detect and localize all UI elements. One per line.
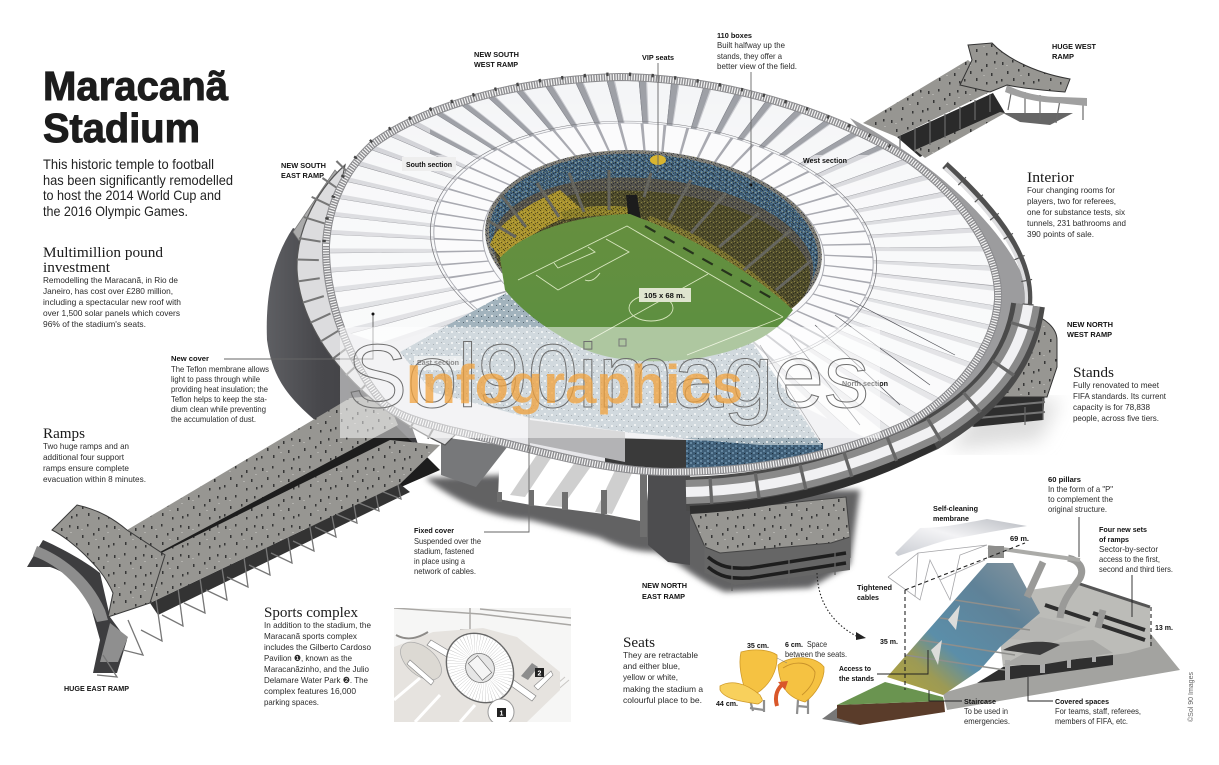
callout: fixed cover: stadium, fastened [414,546,474,556]
callout: fixed cover: Fixed cover [414,526,454,535]
label: new north east ramp [642,581,687,601]
block: sports complex: Pavilion ❶, known as the [264,653,352,663]
title: Stadium [43,105,200,151]
map badge 1 [497,708,506,718]
section ground shadow [822,708,860,725]
ramp arms [127,395,398,552]
block: multimillion investment [43,245,181,329]
ramp support legs [97,485,401,677]
block: sports complex: Delamare Water Park ❷. The [264,675,368,685]
block: interior: tunnels, 231 bathrooms and [1027,218,1126,228]
section labels: South section [406,160,452,169]
block: interior: Interior [1027,170,1074,186]
watermark: Sol90images [347,327,869,427]
block: stands [1073,365,1167,423]
parking level [977,655,1113,683]
section labels: Access to [839,664,871,673]
tunnel [626,195,641,220]
site map [394,608,571,725]
section labels: 13 m. [1155,623,1173,632]
callout: 60 pillars [1048,475,1113,514]
darker upper roof panels [430,81,883,155]
seating slope [887,563,1040,695]
stand aisles [487,170,812,290]
callout: covered spaces: members of FIFA, etc. [1055,716,1128,726]
cables [888,545,987,600]
block: seats: and either blue, [623,661,680,671]
block: multimillion investment: over 1,500 solar panels which covers [43,308,180,318]
stub columns [497,470,647,537]
ramp shadow [27,540,127,673]
block: sports complex: Sports complex [264,605,358,621]
callout: fixed cover: Suspended over the [414,536,481,546]
map badge 2 [535,668,544,678]
ramp junction plate [52,505,165,617]
top labels: EAST RAMP [281,171,324,180]
callout: covered spaces: For teams, staff, referees, [1055,706,1141,716]
intro text: has been significantly remodelled [43,172,233,188]
section labels: Self-cleaning [933,504,978,513]
block: sports complex: complex features 16,000 [264,686,356,696]
concrete base [943,633,1180,710]
ramp block [1000,583,1150,667]
block: sports complex [264,605,371,707]
ramp legs [900,88,1083,157]
near blue seats [686,440,823,468]
icon: seats illustration [720,650,824,714]
block: ramps: evacuation within 8 minutes. [43,474,146,484]
top labels: HUGE WEST [1052,42,1096,51]
cutaway gap below the near stands [497,445,690,565]
roof [330,81,994,468]
intro text [43,156,233,219]
callout: four new sets of ramps: of ramps [1099,535,1129,544]
seat dimension labels: 35 cm. [747,641,769,650]
new north east ramp [690,497,850,591]
left facade chunk [441,437,508,487]
callout: boxes: Built halfway up the [717,40,785,50]
block: multimillion investment: Remodelling the Maracanã, in Rio de [43,275,178,285]
callout: covered spaces: Covered spaces [1055,697,1109,706]
seat dimension labels [716,639,847,708]
callout: staircase [964,697,1010,726]
top labels: RAMP [1052,52,1074,61]
block: ramps [43,426,146,484]
callout: staircase: Staircase [964,697,996,706]
new north west ramp [973,313,1057,427]
map land [394,628,560,722]
callout: 60 pillars: original structure. [1048,504,1107,514]
callout: new cover: dium clean while preventing [171,404,266,414]
callout: new cover: The Teflon membrane allows [171,364,269,374]
block: stands: FIFA standards. Its current [1073,391,1167,401]
top labels [281,42,1113,339]
section labels [839,504,1173,683]
block: multimillion investment: including a spectacular new roof with [43,297,181,307]
seat dimension labels: Space [807,639,827,649]
intro text: This historic temple to football [43,156,214,172]
block: interior: 390 points of sale. [1027,229,1094,239]
section labels: membrane [933,514,969,523]
map ramps [427,640,536,701]
callout: 60 pillars: 60 pillars [1048,475,1081,484]
bowl far stands [485,150,822,309]
pitch size tag: 105 x 68 m. [644,291,685,300]
callout: four new sets of ramps [1099,525,1173,574]
callout: 60 pillars: to complement the [1048,494,1113,504]
tube pillars [686,305,1028,492]
section labels [402,156,888,388]
right facade [686,165,1028,510]
map water park 2 [521,663,538,680]
pitch size tag [639,288,691,302]
fold arrow [776,684,783,706]
right rim fill [850,118,1030,440]
seat dimension labels: 44 cm. [716,699,738,708]
map roads [394,608,571,630]
block: stands: capacity is for 78,838 [1073,402,1150,412]
block: seats: Seats [623,635,655,651]
block: interior: players, two for referees, [1027,196,1116,206]
top labels: VIP seats [642,53,674,62]
block: multimillion investment: 96% of the stadium's seats. [43,319,146,329]
section labels: East section [417,358,459,367]
block: stands: people, across five tiers. [1073,413,1159,423]
top beam [988,547,1080,560]
callout: four new sets of ramps: access to the first, [1099,554,1160,564]
top labels: WEST RAMP [474,60,518,69]
top labels: NEW SOUTH [474,50,519,59]
boxes leader [750,72,752,185]
block: sports complex: In addition to the stadium, the [264,620,371,630]
section labels: Tightened [857,583,892,592]
top labels: NEW SOUTH [281,161,326,170]
dotted arrow to section [817,573,866,640]
block: seats [623,635,703,705]
map stadium [446,632,514,704]
map badge 1: 1 [500,710,504,718]
block: ramps: Two huge ramps and an [43,441,129,451]
block: multimillion investment: Janeiro, has cost over £280 million, [43,286,173,296]
label: new north east ramp: NEW NORTH [642,581,687,590]
section labels: the stands [839,674,874,683]
block: ramps: additional four support [43,452,125,462]
block: stands: Stands [1073,365,1114,381]
new south east ramp [293,170,342,242]
callout: new cover: providing heat insulation; the [171,384,268,394]
callout: new cover: the accumulation of dust. [171,414,256,424]
block: seats: colourful place to be. [623,695,702,705]
top labels: NEW NORTH [1067,320,1113,329]
label: new north east ramp: EAST RAMP [642,592,685,601]
callout: boxes: better view of the field. [717,61,797,71]
block: interior: one for substance tests, six [1027,207,1126,217]
callout: boxes: 110 boxes [717,31,752,40]
section labels: West section [803,156,847,165]
title [43,63,228,151]
new cover leader [224,314,373,359]
section labels: North section [842,379,888,388]
near side cut band [348,326,864,462]
roof panels [349,64,959,436]
fixed cover leader [484,410,529,532]
callout: staircase: To be used in [964,706,1008,716]
roof ring [324,74,998,472]
block: interior: Four changing rooms for [1027,185,1115,195]
block: sports complex: Maracanã sports complex [264,631,358,641]
benches [645,226,775,300]
callout: staircase: emergencies. [964,716,1010,726]
callout: boxes: stands, they offer a [717,51,782,61]
open seat [740,650,777,693]
intro text: the 2016 Olympic Games. [43,203,188,219]
yellow seats [490,190,585,262]
block: sports complex: Maracanãzinho, and the Julio [264,664,369,674]
folded seat [778,658,824,702]
pillars [1027,558,1103,628]
right near roof panels [760,300,955,440]
section leaders [1078,517,1080,557]
callout: 60 pillars: In the form of a "P" [1048,484,1113,494]
callout: covered spaces [1055,697,1141,726]
intro text: to host the 2014 World Cup and [43,187,221,203]
dimension lines [905,543,1151,690]
callout: new cover: New cover [171,354,209,363]
callout: fixed cover [414,526,481,576]
near dark gallery [605,438,686,470]
stadium ground shadows [267,228,1060,592]
block: sports complex: parking spaces. [264,697,319,707]
huge east ramp [27,395,440,677]
callout: four new sets of ramps: second and third tiers. [1099,564,1173,574]
block: interior [1027,170,1126,239]
map track [400,642,442,680]
callout: fixed cover: network of cables. [414,566,476,576]
block: seats: making the stadium a [623,684,703,694]
section labels: 35 m. [880,637,898,646]
block: sports complex: includes the Gilberto Cardoso [264,642,371,652]
callout: new cover: Teflon helps to keep the sta- [171,394,267,404]
map badge 2: 2 [538,670,542,678]
stand cross-section [822,517,1180,725]
VIP seats [650,155,666,165]
seat dimension labels: 6 cm. [785,640,803,649]
huge west ramp [863,43,1087,158]
left rim cells [297,165,460,445]
near stands [400,288,822,445]
tier slabs [1003,640,1113,665]
inner roof band [430,120,878,364]
watermark: Infographics [406,353,743,415]
block: ramps: Ramps [43,426,85,442]
callout: boxes [717,31,797,71]
membrane [895,519,1027,556]
pitch [500,214,793,361]
top labels: WEST RAMP [1067,330,1112,339]
vip seats leader [657,63,659,172]
field markings [518,226,783,355]
callout: new cover [171,354,269,424]
credit: ©Sol 90 Images [1186,672,1195,722]
title: Maracanã [43,63,228,109]
block: multimillion investment: investment [43,260,111,276]
block: ramps: ramps ensure complete [43,463,129,473]
callout: new cover: light to pass through while [171,374,260,384]
block: seats: They are retractable [623,650,698,660]
grass and soil [837,701,945,725]
white tube [686,305,1028,492]
dark shadow column [648,470,690,565]
callout: four new sets of ramps: Sector-by-sector [1099,544,1158,554]
block: multimillion investment: Multimillion pound [43,245,163,261]
seat dimension labels: between the seats. [785,649,847,659]
section labels: cables [857,593,879,602]
map pavilion 1 [488,699,514,725]
block: stands: Fully renovated to meet [1073,380,1160,390]
callout: fixed cover: in place using a [414,556,465,566]
section labels: 69 m. [1010,534,1029,543]
callout: four new sets of ramps: Four new sets [1099,525,1147,534]
block: seats: yellow or white, [623,672,678,682]
label: huge east ramp: HUGE EAST RAMP [64,684,129,693]
